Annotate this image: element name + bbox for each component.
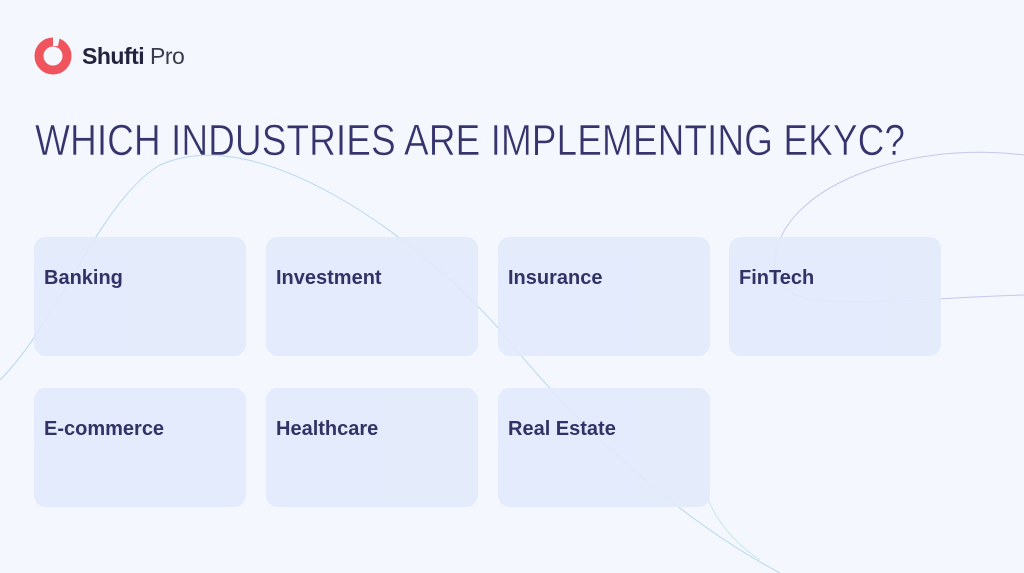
logo — [34, 38, 184, 74]
card: Investment — [266, 237, 478, 356]
card: Real Estate: Real Estate — [508, 418, 616, 440]
card: Insurance: Insurance — [508, 267, 602, 289]
card: FinTech — [729, 237, 941, 356]
card: Banking: Banking — [44, 267, 123, 289]
logo text: Shufti Pro — [82, 43, 184, 69]
card: Healthcare: Healthcare — [276, 418, 378, 440]
card: Healthcare — [266, 388, 478, 507]
card: Banking — [34, 237, 246, 356]
card: FinTech: FinTech — [739, 267, 814, 289]
icon: logo ring — [34, 38, 72, 74]
card: Investment: Investment — [276, 267, 382, 289]
card: Real Estate — [498, 388, 710, 507]
card: E-commerce — [34, 388, 246, 507]
card: Insurance — [498, 237, 710, 356]
card: E-commerce: E-commerce — [44, 418, 164, 440]
